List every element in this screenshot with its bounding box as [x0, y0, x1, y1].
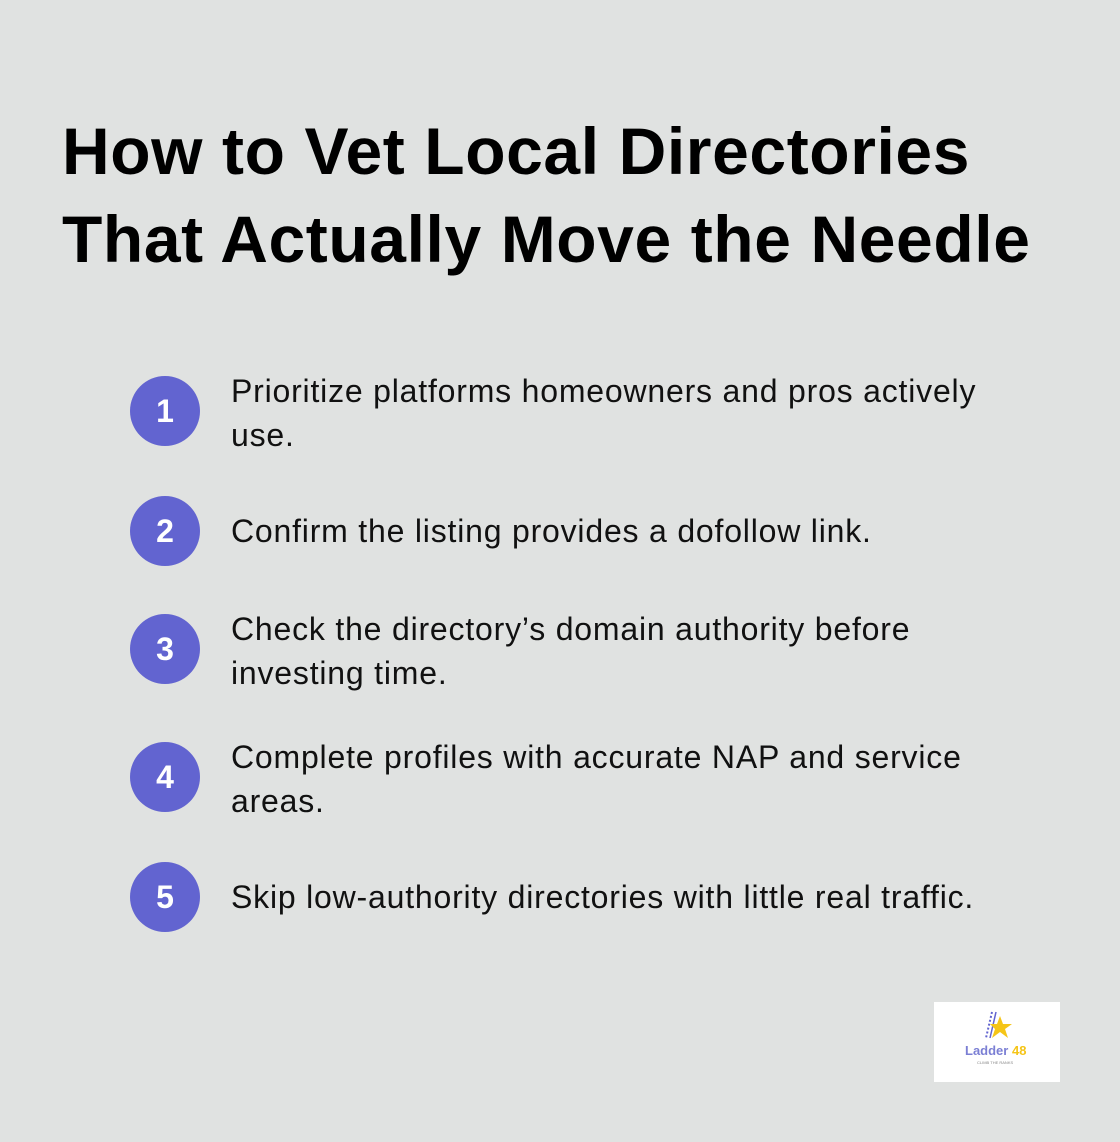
step 1: Prioritize platforms homeowners and pros actively: [231, 373, 976, 409]
step 1: [130, 373, 976, 453]
logo: CLIMB THE RANKS: [977, 1060, 1013, 1065]
step 5: [130, 862, 974, 932]
step 2: [130, 496, 872, 566]
step 2: 2: [156, 513, 174, 549]
step 4: 4: [156, 759, 174, 795]
step 5: Skip low-authority directories with little real traffic.: [231, 879, 974, 915]
step 4: Complete profiles with accurate NAP and service: [231, 739, 962, 775]
step 3: 3: [156, 631, 174, 667]
title: That Actually Move the Needle: [62, 202, 1031, 276]
step 5: 5: [156, 879, 174, 915]
step 3: investing time.: [231, 655, 448, 691]
step 3: Check the directory’s domain authority before: [231, 611, 910, 647]
logo: Ladder 48: [965, 1043, 1026, 1058]
step 1: use.: [231, 417, 295, 453]
step 2: Confirm the listing provides a dofollow link.: [231, 513, 872, 549]
step 1: 1: [156, 393, 174, 429]
title: [62, 114, 1031, 276]
step 3: [130, 611, 910, 691]
step 4: areas.: [231, 783, 325, 819]
title: How to Vet Local Directories: [62, 114, 970, 188]
logo: [934, 1002, 1060, 1082]
step 4: [130, 739, 962, 819]
